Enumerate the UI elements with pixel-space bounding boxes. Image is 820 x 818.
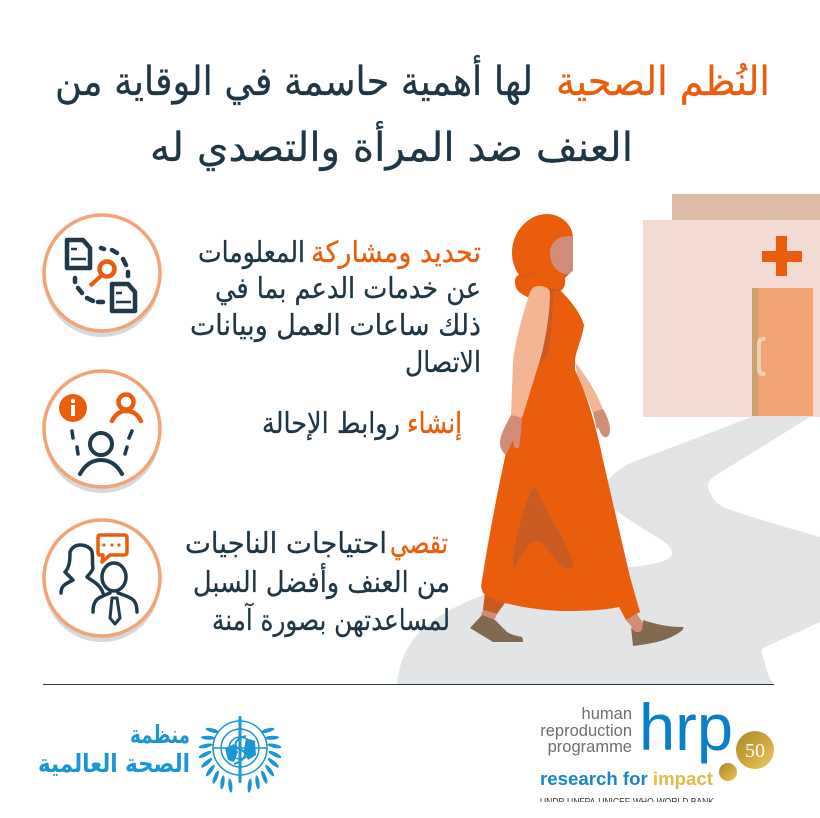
- front foot: [626, 614, 643, 632]
- icon: documents and magnifier: [44, 215, 160, 337]
- text: survivors needs: [185, 526, 450, 637]
- back shoe: [470, 615, 523, 642]
- title first line: لها أهمية حاسمة في الوقاية من: [55, 55, 533, 105]
- woman walking: [470, 214, 683, 646]
- text: survivors needs: لمساعدتهن بصورة آمنة: [212, 602, 450, 637]
- back hand: [593, 409, 610, 437]
- hijab: [512, 214, 573, 298]
- dress shadows: [539, 288, 561, 363]
- icon: referral people: [44, 371, 160, 493]
- clinic building: [643, 194, 820, 417]
- road: [397, 415, 820, 684]
- item 3: [44, 520, 450, 642]
- text: survivors needs: من العنف وأفضل السبل: [193, 562, 450, 599]
- gold 50 badge: 50: [745, 740, 765, 762]
- item 2: [44, 371, 462, 493]
- building wall: [643, 220, 820, 417]
- text: identify and share: تحديد ومشاركة: [311, 235, 481, 269]
- programme name: human: [582, 705, 632, 723]
- WHO name: منظمة: [130, 720, 190, 749]
- WHO emblem: [198, 716, 282, 793]
- front hand: [500, 415, 522, 455]
- programme name: programme: [548, 738, 632, 756]
- front arm: [511, 286, 550, 418]
- text: identify and share: [190, 235, 481, 379]
- text: identify and share: عن خدمات الدعم بما في: [215, 271, 481, 306]
- icon: survivors conversation: [44, 520, 160, 642]
- back arm: [575, 362, 603, 413]
- WHO name: الصحة العالمية: [38, 749, 190, 778]
- text: survivors needs: احتياجات الناجيات: [185, 526, 387, 560]
- partner organisations: UNDP·UNFPA·UNICEF·WHO·WORLD BANK: [540, 797, 714, 808]
- face: [550, 236, 573, 274]
- text: identify and share: الاتصال: [405, 345, 481, 379]
- scarf fold: [519, 269, 543, 279]
- building roof: [672, 194, 820, 220]
- research for impact: research for impact: [540, 769, 713, 789]
- door: [752, 288, 813, 416]
- dress: [481, 290, 640, 620]
- back leg: [483, 592, 505, 614]
- text: establish referral links: إنشاء: [407, 406, 462, 441]
- front shoe: [631, 620, 683, 646]
- icon: medical cross: [762, 236, 802, 276]
- WHO logo: [38, 716, 282, 793]
- divider: [43, 684, 774, 685]
- WHO name: [38, 720, 190, 778]
- hrp letters: hrp: [639, 690, 733, 764]
- programme name: reproduction: [540, 722, 632, 740]
- title highlighted words: النُظم الصحية: [556, 59, 770, 105]
- text: identify and share: ذلك ساعات العمل وبيانات: [190, 308, 481, 342]
- title: [55, 55, 770, 171]
- text: identify and share: المعلومات: [198, 235, 305, 269]
- item 1: [44, 215, 481, 379]
- gold 50 badge: [719, 731, 774, 781]
- text: establish referral links: روابط الإحالة: [262, 406, 400, 441]
- title second line: العنف ضد المرأة والتصدي له: [150, 121, 633, 171]
- HRP logo: [530, 690, 774, 810]
- text: survivors needs: تقصي: [390, 526, 448, 561]
- programme name: [540, 705, 632, 756]
